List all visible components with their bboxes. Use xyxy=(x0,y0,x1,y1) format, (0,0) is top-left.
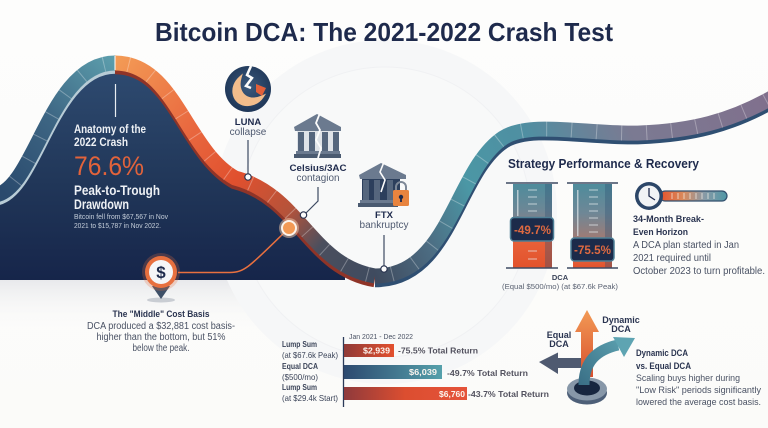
arrow labels: Equal xyxy=(547,330,571,340)
crash anatomy text block: Anatomy of the xyxy=(74,122,146,136)
crash anatomy text block: Peak-to-Trough xyxy=(74,183,160,198)
cost basis text: DCA produced a $32,881 cost basis- xyxy=(87,321,235,332)
break-even text: 2021 required until xyxy=(633,253,711,264)
break-even text: Even Horizon xyxy=(633,227,688,238)
bar chart: returns: $2,939 xyxy=(363,346,390,356)
bar chart: returns: ($500/mo) xyxy=(282,372,318,382)
break-even text: 34-Month Break- xyxy=(633,214,704,225)
cost basis text: below the peak. xyxy=(132,343,190,354)
LUNA pointer xyxy=(245,140,251,180)
icon: LUNA cracked moon xyxy=(225,66,271,112)
icon: diverging arrows xyxy=(539,310,635,404)
bar chart: returns: (at $29.4k Start) xyxy=(282,393,338,403)
crash anatomy text block: 2021 to $15,787 in Nov 2022. xyxy=(74,221,161,230)
arrow labels: DCA xyxy=(549,339,569,349)
FTX label: FTX xyxy=(375,210,394,221)
icon: cracked bank xyxy=(294,113,341,158)
bar chart: returns: Lump Sum xyxy=(282,339,317,349)
title: Bitcoin DCA: The 2021-2022 Crash Test xyxy=(155,17,613,47)
cost basis text: higher than the bottom, but 51% xyxy=(96,332,226,343)
icon: clock meter xyxy=(635,182,727,210)
icon: FTX locked bank xyxy=(358,162,409,207)
crash anatomy text block: 2022 Crash xyxy=(74,135,128,149)
bar chart: returns: -75.5% Total Return xyxy=(398,346,478,356)
FTX pointer xyxy=(381,235,387,272)
Celsius label: Celsius/3AC xyxy=(290,163,347,174)
cost basis text: The "Middle" Cost Basis xyxy=(112,309,210,320)
FTX label: bankruptcy xyxy=(360,220,408,231)
break-even text: A DCA plan started in Jan xyxy=(633,240,739,251)
bar chart: returns xyxy=(282,332,549,407)
dynamic DCA text: Dynamic DCA xyxy=(636,348,688,358)
bar chart: returns: $6,760 xyxy=(439,389,465,399)
LUNA label: collapse xyxy=(230,127,267,138)
cost basis text xyxy=(87,309,235,354)
tube captions: DCA xyxy=(552,273,569,282)
crash anatomy text block: Bitcoin fell from $67,567 in Nov xyxy=(74,212,168,221)
cost basis connector xyxy=(178,218,299,272)
icon: dollar pin xyxy=(142,253,180,302)
bar chart: returns: Jan 2021 - Dec 2022 xyxy=(349,332,413,341)
Celsius pointer xyxy=(300,187,318,218)
tube captions: (Equal $500/mo) (at $67.6k Peak) xyxy=(502,282,619,291)
bar chart: returns: -49.7% Total Return xyxy=(447,368,528,378)
dynamic DCA text: lowered the average cost basis. xyxy=(636,397,761,408)
bar chart: returns: -43.7% Total Return xyxy=(468,389,549,399)
tube: lump sum: -75.5% xyxy=(574,243,611,257)
LUNA label xyxy=(230,117,267,138)
tube captions xyxy=(502,273,619,291)
bar chart: returns: Equal DCA xyxy=(282,361,318,371)
Celsius label: contagion xyxy=(296,173,340,184)
arrow labels xyxy=(547,315,640,349)
dynamic DCA text: "Low Risk" periods significantly xyxy=(636,385,761,396)
dynamic DCA text: vs. Equal DCA xyxy=(636,361,691,371)
FTX label xyxy=(360,210,408,231)
crash anatomy text block: Drawdown xyxy=(74,197,129,212)
heading: strategy performance: Strategy Performance & Recovery xyxy=(508,157,699,171)
peak marker line xyxy=(114,84,116,117)
bar chart: returns: (at $67.6k Peak) xyxy=(282,350,338,360)
tube: DCA xyxy=(506,183,558,268)
bar chart: returns: Lump Sum xyxy=(282,382,317,392)
price curve band xyxy=(0,56,768,279)
LUNA label: LUNA xyxy=(235,117,261,128)
arrow labels: DCA xyxy=(611,324,631,334)
crash anatomy text block xyxy=(74,122,168,230)
dynamic DCA text xyxy=(636,348,761,408)
arrow labels: Dynamic xyxy=(602,315,640,325)
dynamic DCA text: Scaling buys higher during xyxy=(636,373,740,384)
bar chart: returns: $6,039 xyxy=(409,367,437,377)
break-even text xyxy=(633,214,765,277)
dark area under curve xyxy=(0,74,345,280)
icon: dollar pin: $ xyxy=(156,263,166,282)
break-even text: October 2023 to turn profitable. xyxy=(633,266,765,277)
watermark seal xyxy=(213,40,557,384)
tube: DCA: -49.7% xyxy=(514,223,551,237)
tube: lump sum xyxy=(567,183,618,268)
crash anatomy text block: 76.6% xyxy=(74,151,144,181)
Celsius label xyxy=(290,163,347,184)
shading below the dark area xyxy=(0,280,345,330)
